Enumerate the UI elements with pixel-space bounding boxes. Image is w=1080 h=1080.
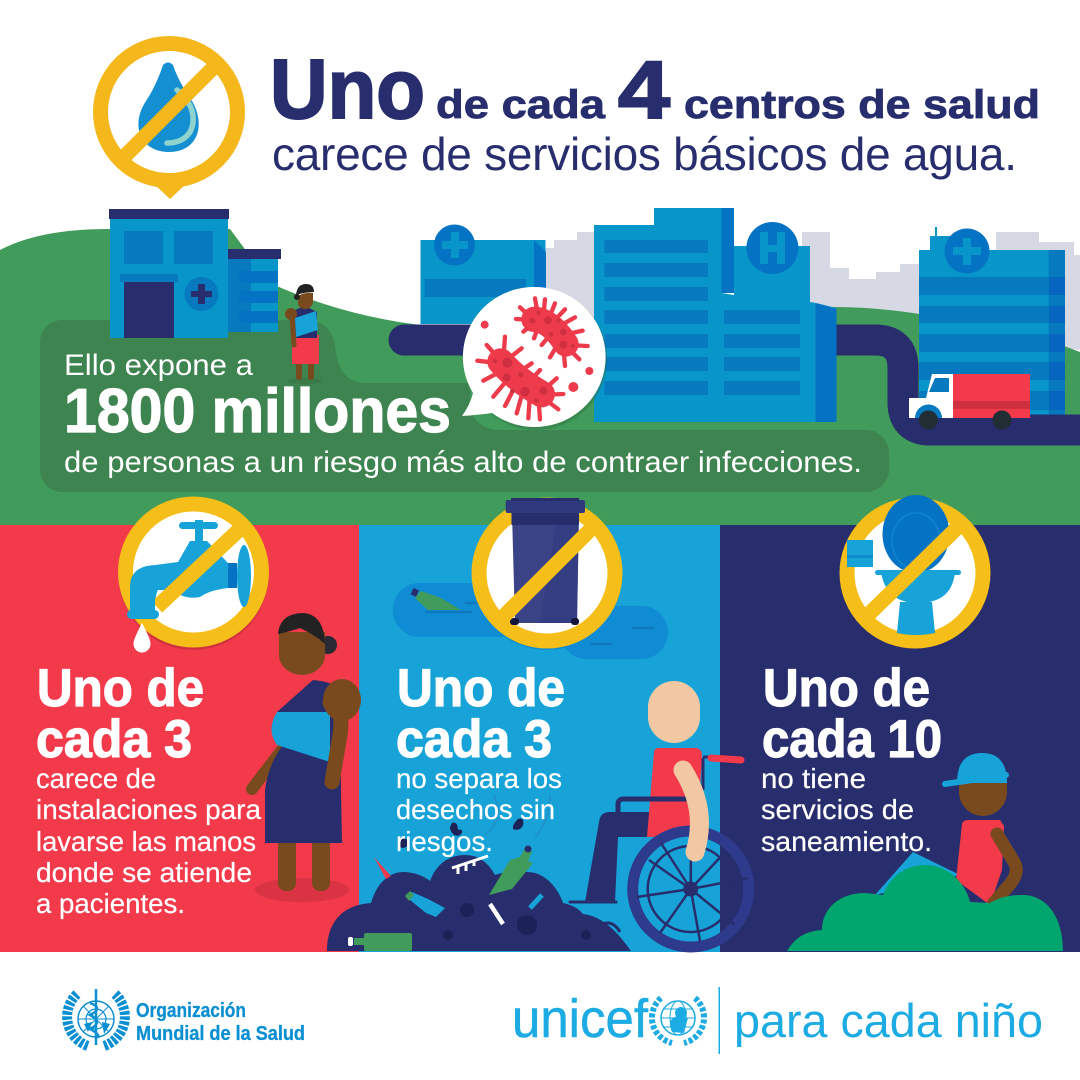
icon: no water — [100, 44, 238, 199]
text: 1800 million statement: de personas a un riesgo más alto de contraer infecciones. — [64, 446, 862, 479]
road — [404, 340, 1080, 430]
title: Uno — [270, 42, 425, 136]
text: handwashing: lavarse las manos — [36, 826, 256, 857]
figure: woman with baby — [252, 613, 361, 902]
heading: uno de cada 3 (red) — [36, 659, 204, 769]
logo: WHO — [67, 989, 125, 1046]
text: waste: riesgos. — [396, 826, 493, 857]
icon: speech bubble with bacteria — [462, 287, 607, 430]
text: waste — [396, 763, 562, 857]
skyline — [540, 232, 1080, 350]
text: WHO name — [136, 1000, 305, 1045]
figure: wheelchair rider upper body — [618, 681, 749, 947]
text: waste: desechos sin — [396, 794, 555, 825]
text: sanitation: servicios de — [761, 794, 914, 825]
heading: uno de cada 3 (blue): Uno de — [397, 659, 565, 718]
logo: unicef: para cada niño — [734, 994, 1043, 1047]
title: centros de salud — [684, 83, 1040, 127]
heading: uno de cada 10: cada 10 — [762, 710, 942, 769]
road section over tower — [903, 400, 1080, 430]
heading: uno de cada 3 (blue): cada 3 — [396, 710, 552, 769]
text: sanitation: saneamiento. — [761, 826, 932, 857]
puddles with floating bottle — [393, 583, 668, 659]
bacteria spots — [493, 311, 575, 403]
text: 1800 million statement — [64, 349, 862, 479]
logo: unicef: unicef — [512, 989, 649, 1049]
building: main hospital — [594, 208, 836, 422]
text: sanitation: no tiene — [761, 763, 866, 794]
icon: no tap — [118, 500, 268, 652]
heading: uno de cada 3 (red): Uno de — [37, 659, 204, 718]
text: 1800 million statement: Ello expone a — [64, 349, 253, 382]
waste heap — [327, 795, 631, 951]
title: de cada — [436, 83, 606, 127]
bushes — [787, 865, 1063, 951]
text: 1800 million statement: 1800 millones — [64, 377, 451, 446]
text: sanitation — [761, 763, 932, 857]
text: handwashing: donde se atiende — [36, 857, 252, 888]
heading: uno de cada 3 (blue) — [396, 659, 565, 769]
title: 4 — [618, 45, 670, 136]
panel: handwashing (red) — [0, 525, 359, 952]
panel: 1800 million callout background — [40, 320, 889, 492]
building: hospital with cross, middle left — [420, 224, 546, 324]
panel: sanitation (navy) — [720, 525, 1080, 952]
bacteria lower — [477, 337, 563, 419]
emblem — [652, 998, 704, 1043]
figure: small woman with baby — [285, 284, 322, 384]
building: right tower — [919, 227, 1065, 415]
logo: unicef — [512, 987, 1043, 1054]
title: carece de servicios básicos de agua. — [272, 128, 1017, 180]
green hill landscape — [0, 229, 1080, 526]
text: handwashing: a pacientes. — [36, 888, 185, 919]
heading: uno de cada 10 — [762, 659, 942, 769]
wheel — [633, 831, 749, 947]
text: handwashing — [36, 763, 261, 919]
text: waste: no separa los — [396, 763, 562, 794]
bacteria upper — [516, 298, 588, 366]
text: handwashing: carece de — [36, 763, 156, 794]
icon: delivery truck — [909, 374, 1030, 430]
figure: person in wheelchair — [570, 812, 655, 932]
text: WHO name: Mundial de la Salud — [136, 1023, 305, 1045]
figure: man behind bush — [787, 753, 1063, 951]
heading: uno de cada 3 (red): cada 3 — [36, 710, 192, 769]
building: clinic left — [109, 209, 281, 338]
heading: uno de cada 10: Uno de — [763, 659, 930, 718]
panel: waste (blue) — [359, 525, 720, 952]
bacteria — [477, 298, 593, 419]
text: handwashing: instalaciones para — [36, 794, 261, 825]
text: WHO name: Organización — [136, 1000, 246, 1022]
icon: no toilet — [847, 495, 983, 641]
icon: no waste bin — [472, 498, 622, 650]
title — [270, 42, 1040, 180]
bacteria dots — [481, 321, 593, 392]
